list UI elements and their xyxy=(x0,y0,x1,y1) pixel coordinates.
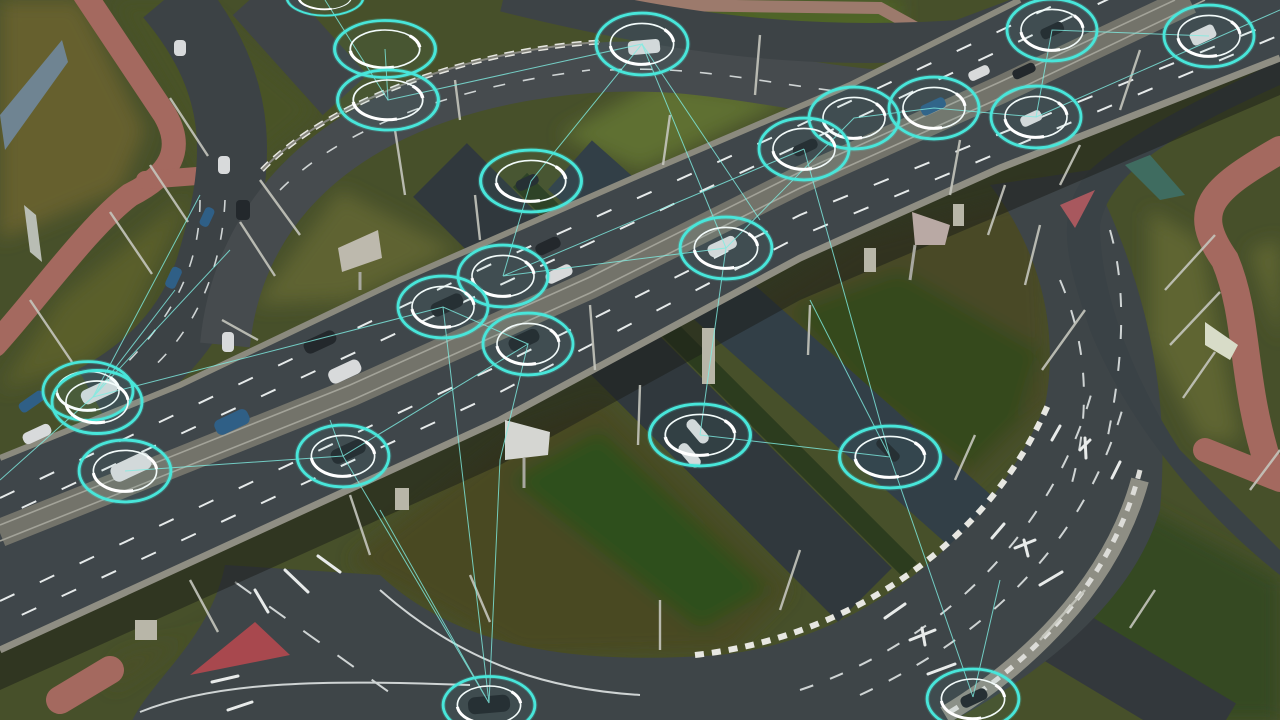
road arrows on the ramp xyxy=(212,426,1120,710)
central median xyxy=(0,0,1190,533)
pillars xyxy=(135,204,964,640)
curved ramps, left and top xyxy=(95,0,1080,400)
billboards and signs xyxy=(0,40,1238,488)
upper carriageway lanes xyxy=(0,0,1150,498)
lower roads under the overpass xyxy=(440,165,1220,720)
upper barrier xyxy=(0,0,1020,458)
